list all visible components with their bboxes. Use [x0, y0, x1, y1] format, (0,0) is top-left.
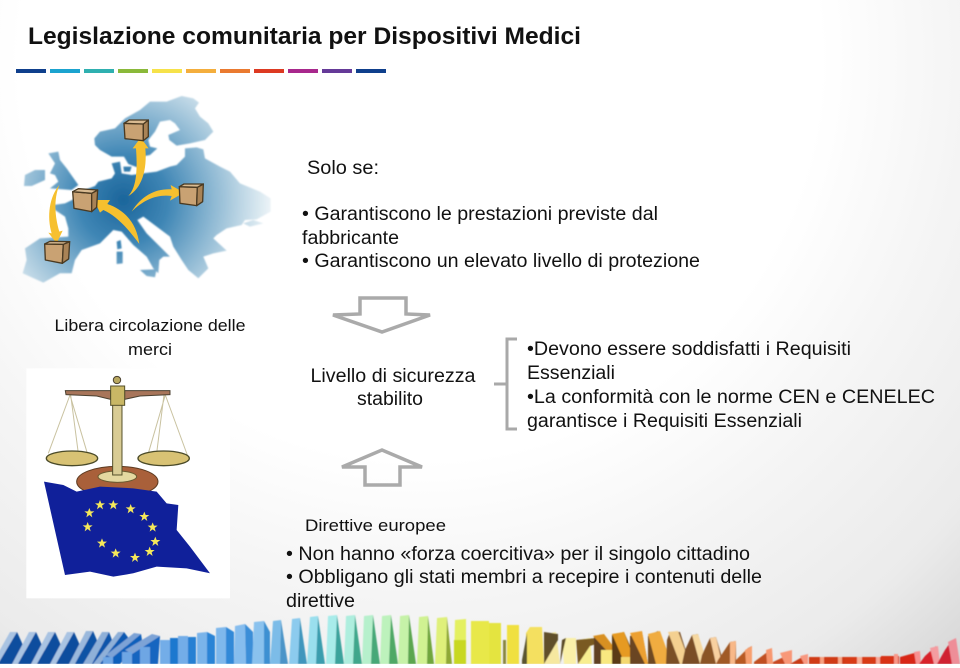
arrow: up [342, 450, 422, 485]
red and pink dominoes [790, 638, 960, 664]
text: free movement label [54, 317, 246, 359]
land masses [23, 96, 271, 283]
text: directives list [286, 544, 762, 612]
icon: scales and EU flag [26, 368, 230, 598]
text: essential requirements [527, 339, 935, 432]
text: free movement label: Libera circolazione delle [54, 317, 246, 335]
text: directives list: • Obbligano gli stati membri a recepire i contenuti delle [286, 567, 762, 588]
text: essential requirements: •Devono essere soddisfatti i Requisiti [527, 339, 851, 360]
text: essential requirements: garantisce i Requisiti Essenziali [527, 411, 802, 432]
text: directives list: • Non hanno «forza coercitiva» per il singolo cittadino [286, 544, 750, 565]
teal and green dominoes [270, 615, 489, 664]
white base strip [0, 664, 960, 668]
text: conditions list: • Garantiscono le prestazioni previste dal [302, 204, 658, 225]
title: Legislazione comunitaria per Dispositivi Medici [28, 23, 581, 50]
leaning blue dominoes [0, 631, 160, 664]
rising blue dominoes [103, 621, 270, 664]
EU flag [44, 482, 210, 577]
text: directives list: direttive [286, 591, 355, 612]
orange and brown dominoes [576, 631, 792, 664]
colour stripe divider [16, 69, 386, 73]
text: conditions list: • Garantiscono un elevato livello di protezione [302, 251, 700, 272]
yellow dominoes [489, 623, 576, 664]
text: essential requirements: Essenziali [527, 363, 615, 384]
text: conditions list [302, 204, 700, 272]
text: European directives label: Direttive europee [305, 517, 446, 535]
text: free movement label: merci [128, 341, 172, 359]
text: essential requirements: •La conformità con le norme CEN e CENELEC [527, 387, 935, 408]
text: safety level [310, 366, 476, 410]
domino strip [0, 615, 960, 668]
map of Europe with parcels [23, 96, 271, 283]
arrows [48, 138, 184, 244]
bracket [494, 339, 517, 429]
text: safety level: stabilito [357, 389, 423, 410]
arrow: down [333, 298, 430, 332]
text: safety level: Livello di sicurezza [310, 366, 476, 387]
text: Solo se: Solo se: [307, 158, 379, 179]
parcels [45, 120, 203, 263]
text: conditions list: fabbricante [302, 228, 399, 249]
